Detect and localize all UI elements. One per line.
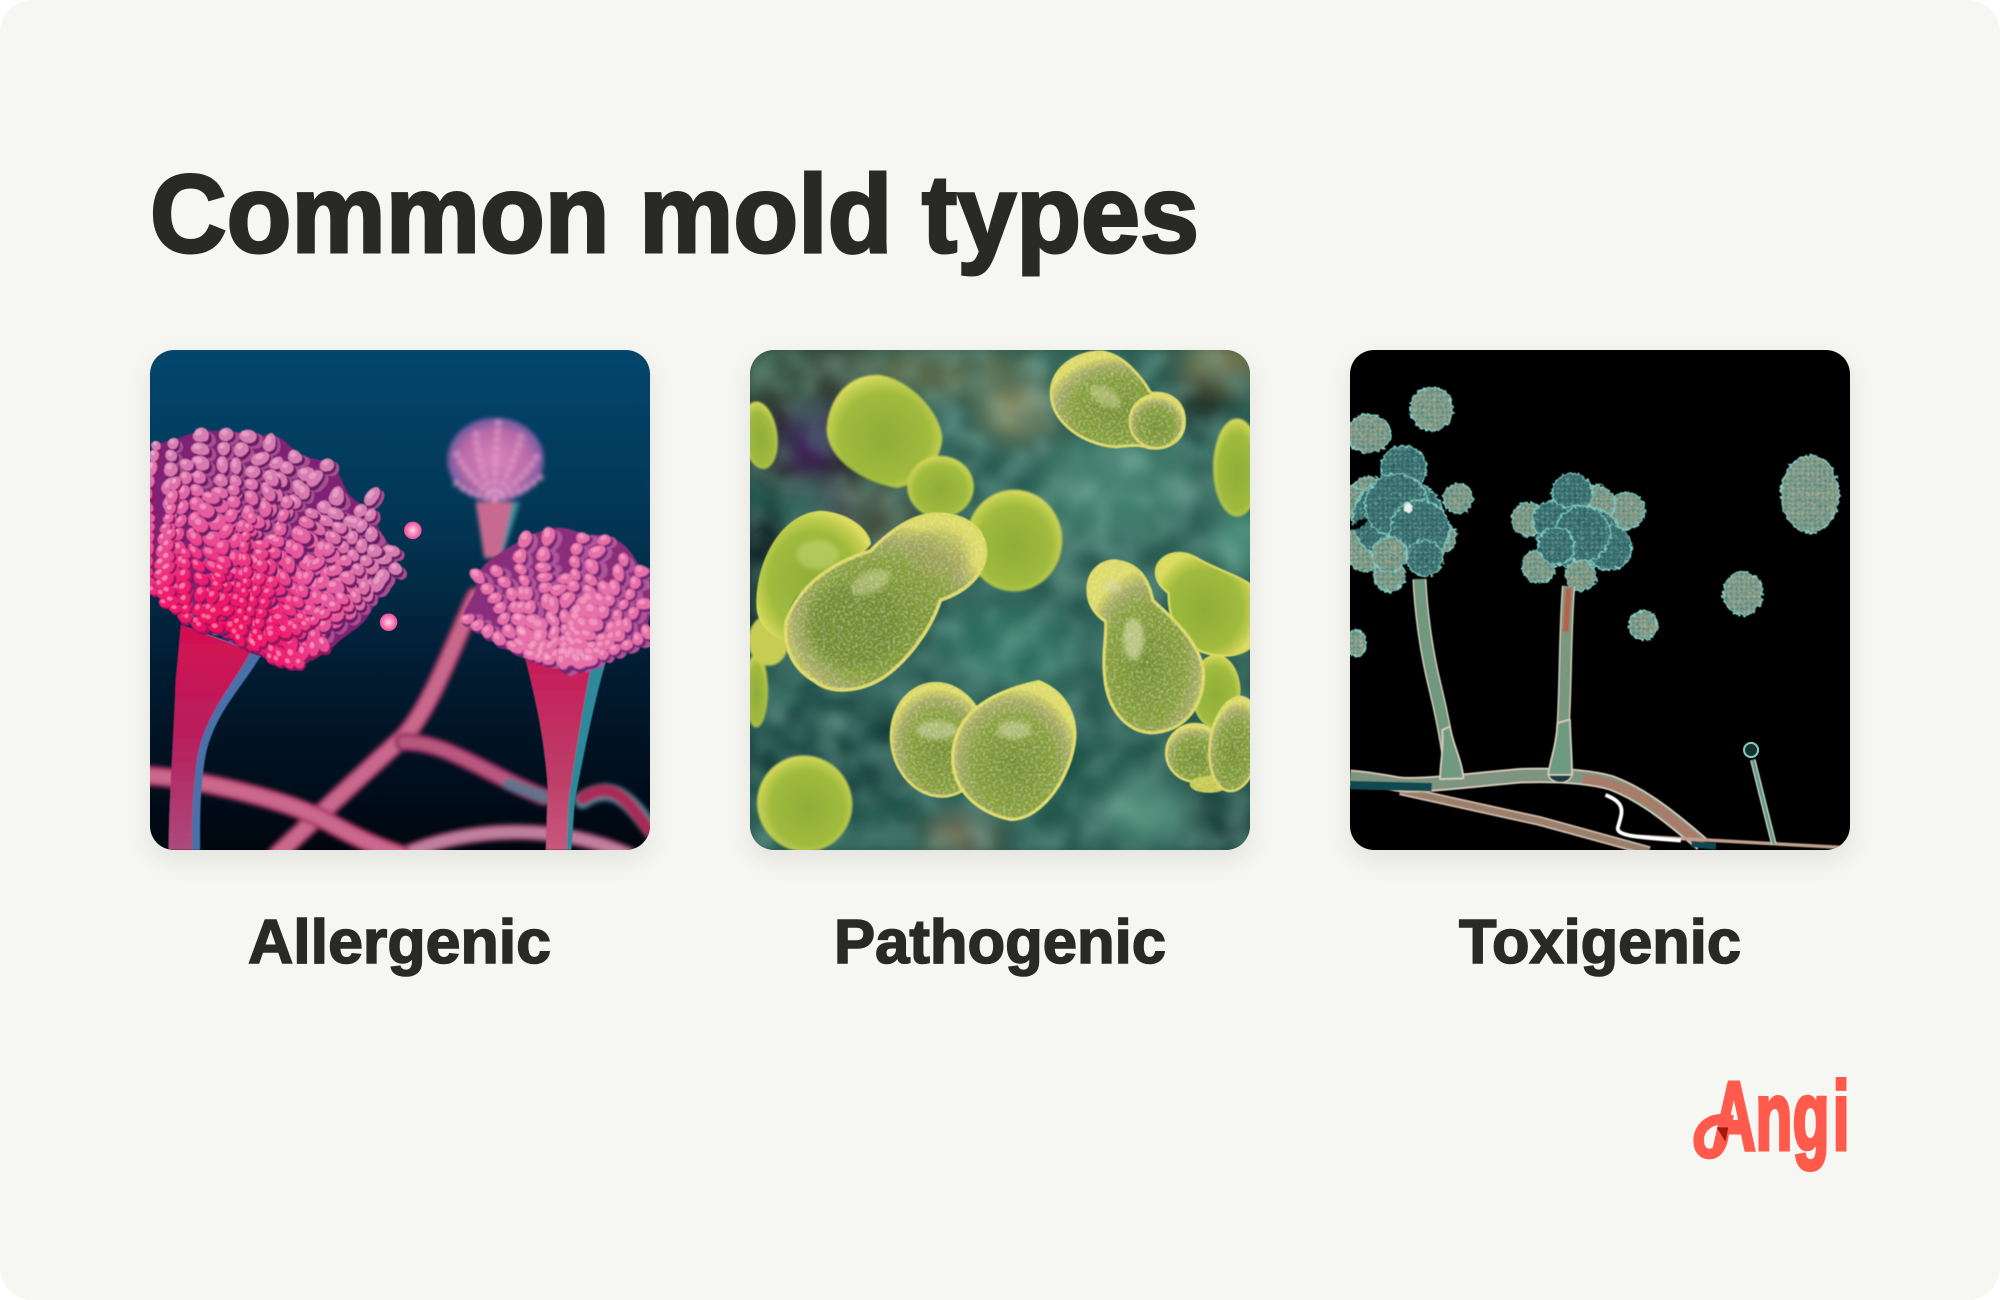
rear blurred cells [738, 375, 1261, 869]
left fruiting head [1335, 446, 1456, 591]
right pear cell [1088, 561, 1204, 733]
stalks and hyphae [1350, 579, 1850, 851]
small sporing tip [1744, 743, 1758, 757]
hyphae network [148, 597, 653, 855]
label: Toxigenic: Toxigenic [1459, 908, 1741, 977]
stalk of left head [169, 625, 263, 850]
loose spores [380, 522, 422, 631]
panel: allergenic mold image [150, 350, 650, 850]
label: Pathogenic: Pathogenic [834, 908, 1166, 977]
centre fruiting head [1511, 473, 1645, 591]
blurred background [723, 334, 1267, 853]
background dark mottling [750, 350, 1250, 850]
bottom right cluster cells [1166, 694, 1267, 794]
title: Common mold types [150, 153, 1199, 276]
background mottling [750, 350, 1250, 850]
floating spore clusters [1346, 387, 1839, 657]
top right budding cell [1051, 352, 1185, 448]
right spore head [467, 531, 660, 667]
back right pear cell [1156, 553, 1253, 728]
panel: toxigenic mold image [1350, 350, 1850, 850]
logo: Angi: Angi [1712, 1063, 1850, 1171]
label: Allergenic: Allergenic [248, 908, 551, 977]
small blurred fruiting head [447, 418, 544, 558]
big pear cell [786, 514, 985, 690]
large spore head [147, 419, 404, 661]
central bottom cell pair [882, 676, 1075, 819]
panel: pathogenic mold image [750, 350, 1250, 850]
rear left cell behind big pear [756, 511, 871, 641]
stalk of right head [525, 656, 606, 850]
